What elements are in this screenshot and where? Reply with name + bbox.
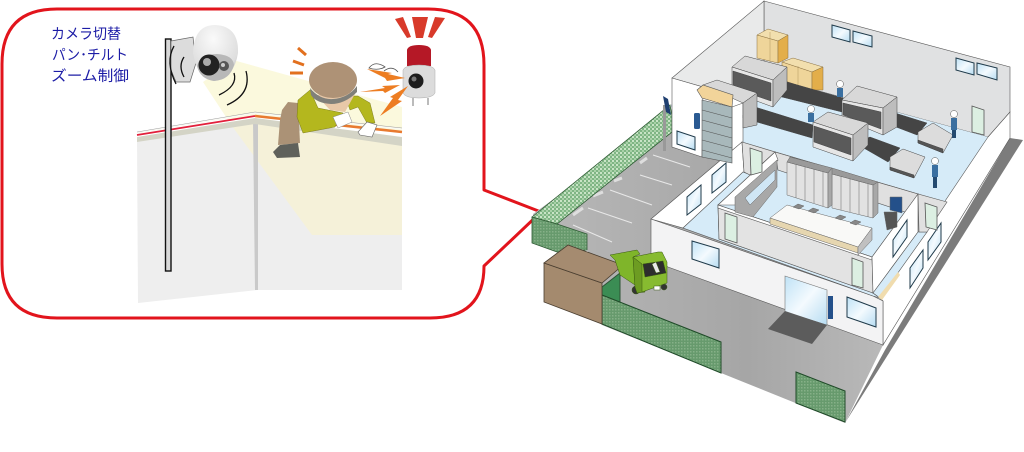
- entrance control panel: [828, 296, 833, 319]
- office floor: [718, 152, 918, 257]
- shutter control panel: [694, 113, 700, 129]
- production machines and conveyors: [703, 56, 953, 178]
- front exterior wall: [651, 219, 883, 345]
- loading dock shutter: [697, 85, 733, 163]
- label: camera control functions: ズーム制御: [51, 68, 129, 85]
- label: camera control functions: パン･チルト: [52, 47, 128, 64]
- right room wall: [918, 194, 947, 232]
- perimeter wall: [137, 112, 402, 303]
- production hall floor: [743, 76, 988, 202]
- callout panel: intrusion detail: [2, 9, 541, 318]
- back room wall: [742, 142, 775, 175]
- right exterior wall: [880, 112, 1010, 345]
- fence: front perimeter: [602, 273, 845, 422]
- tan wall strip: [878, 272, 900, 300]
- delivery truck: [610, 250, 667, 294]
- storage shed: [544, 245, 623, 324]
- icon: alarm sound bolts: [360, 69, 408, 116]
- office lockers and furniture: [735, 157, 902, 255]
- left exterior wall: [651, 142, 744, 228]
- icon: intruder climbing wall: [273, 48, 377, 158]
- stacked cardboard boxes: [757, 29, 823, 90]
- parking bays: [550, 155, 690, 242]
- label: camera control functions: カメラ切替: [51, 26, 121, 43]
- office front partition: [718, 205, 873, 293]
- office left wall top: [718, 152, 778, 205]
- icon: rotating alarm light with speaker: [395, 17, 445, 106]
- icon: PTZ dome camera: [170, 25, 238, 84]
- front entrance door: [785, 276, 827, 325]
- left corridor and front corridor floor: [683, 172, 880, 298]
- right corridor floor: [873, 232, 927, 298]
- fence: left perimeter: [532, 105, 672, 252]
- production hall left inner wall: [672, 1, 764, 92]
- camera field of view beam above wall: [203, 60, 402, 132]
- building windows: [677, 25, 997, 327]
- factory building: [651, 1, 1010, 345]
- production hall back wall: [764, 1, 1010, 137]
- entrance mat: [768, 311, 827, 344]
- loading bay wall: [672, 78, 703, 157]
- label: camera control functions: [51, 26, 129, 85]
- office right wall: [872, 194, 918, 293]
- workers: [808, 80, 958, 188]
- floodlight camera pole: [663, 96, 680, 151]
- interior doors: [725, 106, 984, 288]
- camera pole: [166, 39, 171, 271]
- icon: sound wire squiggle: [369, 64, 398, 72]
- ground right edge: [845, 138, 1023, 423]
- icon: camera motion arcs: [219, 71, 247, 105]
- office back wall: [775, 152, 918, 212]
- factory ground: [532, 118, 1010, 423]
